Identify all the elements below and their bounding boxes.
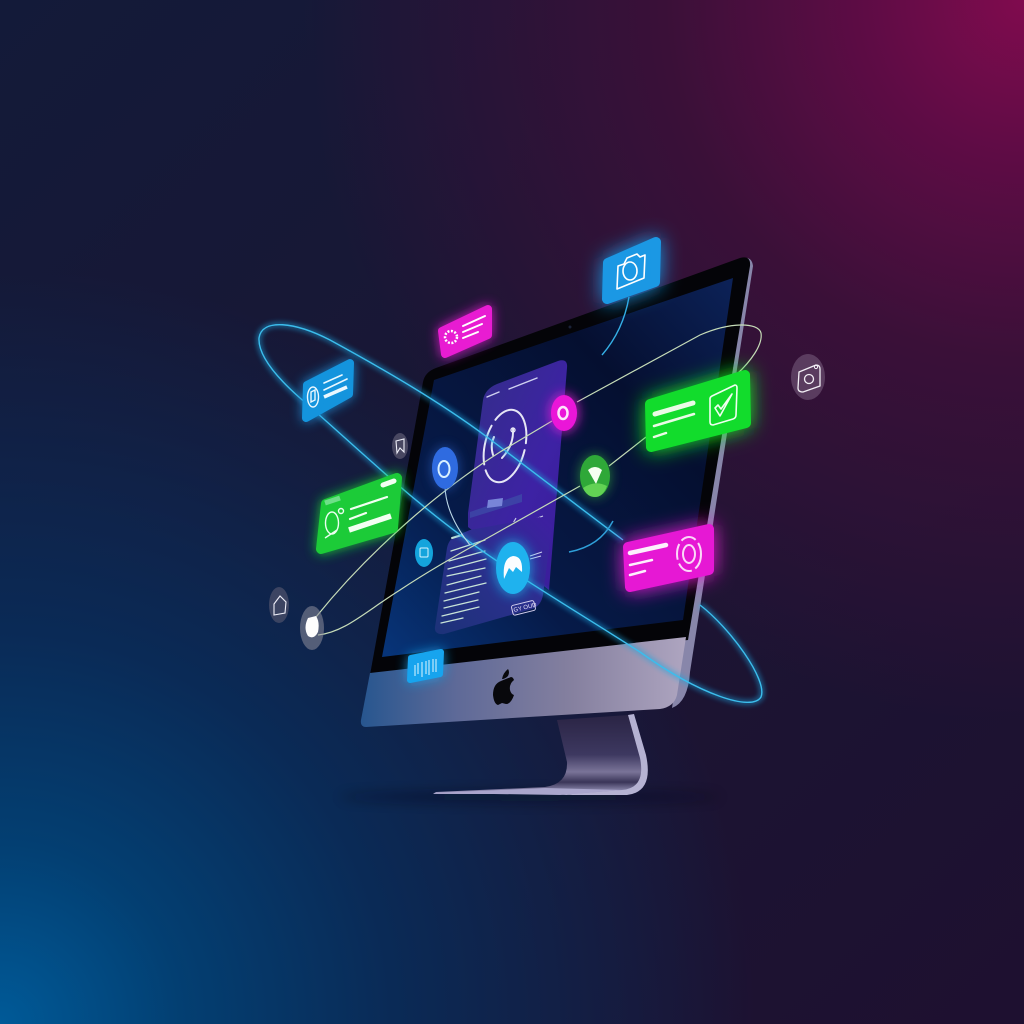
card: magenta top xyxy=(442,309,488,354)
text lines xyxy=(655,403,693,414)
silver side edge xyxy=(672,258,753,708)
text lines xyxy=(350,497,387,519)
connector: arc on screen xyxy=(569,521,613,552)
aluminium chin xyxy=(361,637,686,727)
stand shadow xyxy=(340,792,720,802)
header tag xyxy=(325,498,340,503)
icon: home xyxy=(269,587,289,623)
node: green pin xyxy=(580,455,610,497)
card: magenta target xyxy=(628,529,709,587)
icon: target xyxy=(677,537,701,571)
connector: camera card tail xyxy=(602,297,629,355)
node: small cyan xyxy=(415,539,433,567)
header strip xyxy=(487,378,537,397)
node: cyan main xyxy=(495,541,531,595)
slider bar xyxy=(470,494,522,518)
apple logo xyxy=(493,669,514,705)
node: white blob xyxy=(300,606,324,650)
screen xyxy=(382,278,733,657)
monitor xyxy=(361,257,753,727)
radial gauge xyxy=(477,405,533,487)
card: green coin xyxy=(321,478,397,549)
card: blue lock xyxy=(306,363,350,418)
camera dot xyxy=(568,326,572,328)
icon: instagram xyxy=(791,354,825,400)
button with label: GY OUD xyxy=(513,602,538,614)
node: magenta ring xyxy=(550,394,578,432)
small glyph marks xyxy=(510,516,543,535)
card: green checklist xyxy=(650,375,746,447)
node: timer blue xyxy=(432,447,458,489)
card: camera blue xyxy=(607,242,656,299)
icon: check box xyxy=(710,385,737,425)
black bezel xyxy=(370,257,750,675)
card: small blue waveform xyxy=(410,652,441,680)
text lines xyxy=(441,535,486,623)
icon: camera xyxy=(617,254,645,289)
monitor stand xyxy=(433,714,648,795)
text lines xyxy=(324,375,347,390)
connector: timer to panel xyxy=(445,487,470,545)
icon: badge xyxy=(445,331,457,343)
panel: app screen upper xyxy=(468,360,567,590)
panel: app screen lower xyxy=(435,517,552,634)
icon: coin xyxy=(325,508,344,538)
icon: lock shield xyxy=(308,387,318,407)
orbit: blue ellipse xyxy=(259,325,762,702)
orbit: pale ellipse xyxy=(316,325,761,635)
icon: waveform xyxy=(415,659,436,677)
icon: bookmark xyxy=(392,433,408,459)
text lines xyxy=(630,545,666,553)
text lines xyxy=(463,316,485,338)
